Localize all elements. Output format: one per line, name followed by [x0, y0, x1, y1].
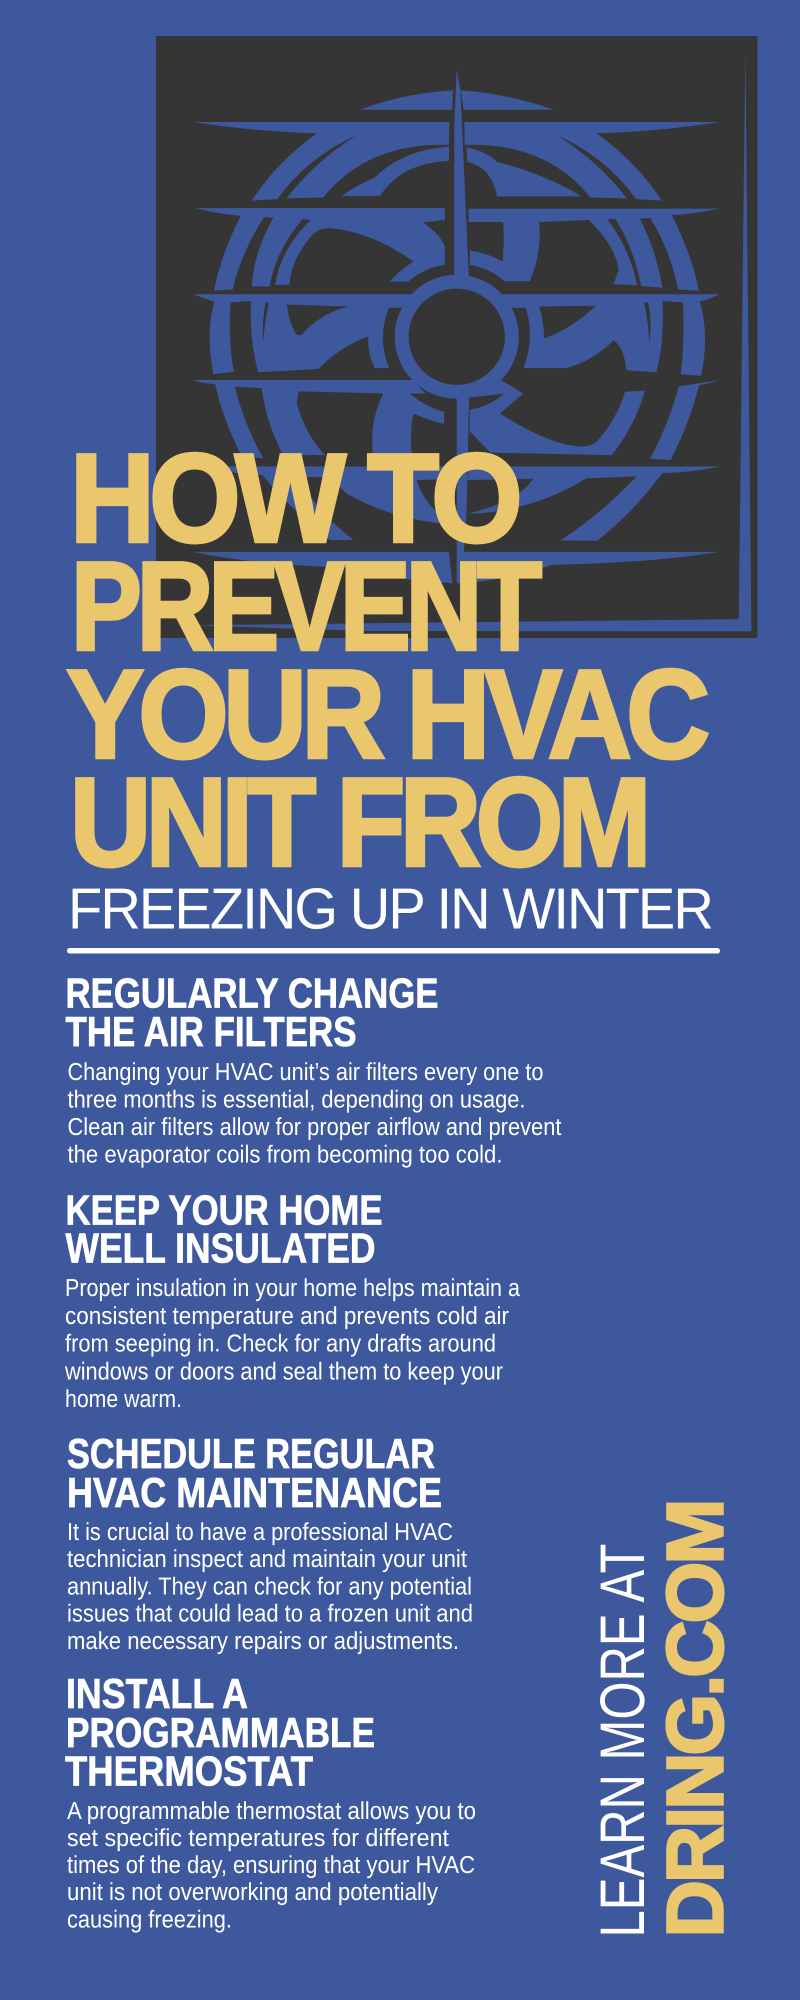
heading: insulation: WELL INSULATED: [66, 1224, 376, 1272]
text: insulation: Proper insulation in your home helps maintain a: [65, 1275, 520, 1302]
heading: air filters: THE AIR FILTERS: [66, 1008, 356, 1055]
section: regularly change the air filters: [66, 970, 562, 1168]
subtitle: FREEZING UP IN WINTER: [68, 876, 712, 942]
heading: insulation: KEEP YOUR HOME: [66, 1186, 382, 1234]
heading: thermostat: INSTALL A: [66, 1670, 248, 1717]
text: insulation: [64, 1275, 520, 1413]
title: UNIT FROM: [70, 752, 646, 892]
title: [66, 428, 707, 892]
title: YOUR HVAC: [66, 644, 707, 784]
title: HOW TO: [70, 428, 518, 568]
text: maintenance: issues that could lead to a frozen unit and: [67, 1600, 473, 1628]
text: insulation: consistent temperature and prevents cold air: [65, 1303, 509, 1330]
text: air filters: Changing your HVAC unit’s air filters every one to: [68, 1059, 544, 1086]
text: air filters: Clean air filters allow for proper airflow and prevent: [68, 1114, 562, 1141]
text: maintenance: [67, 1519, 473, 1655]
text: maintenance: make necessary repairs or adjustments.: [67, 1628, 459, 1655]
text: air filters: three months is essential, depending on usage.: [68, 1086, 526, 1114]
text: maintenance: annually. They can check for any potential: [67, 1574, 472, 1600]
call to action: website: DRING.COM: [650, 1502, 740, 1938]
text: insulation: home warm.: [65, 1386, 182, 1413]
icon: HVAC fan on dark square: [156, 36, 758, 638]
section: schedule regular maintenance: [67, 1430, 473, 1655]
text: maintenance: It is crucial to have a professional HVAC: [67, 1519, 453, 1546]
heading: air filters: REGULARLY CHANGE: [66, 970, 438, 1016]
text: thermostat: times of the day, ensuring that your HVAC: [67, 1852, 475, 1879]
section: install a programmable thermostat: [65, 1670, 476, 1934]
call to action: learn more at: LEARN MORE AT: [588, 1544, 658, 1938]
section: keep your home well insulated: [64, 1186, 520, 1413]
heading: maintenance: [67, 1430, 442, 1516]
heading: insulation: [66, 1186, 382, 1272]
text: thermostat: unit is not overworking and potentially: [67, 1879, 439, 1906]
heading: maintenance: SCHEDULE REGULAR: [67, 1430, 435, 1477]
heading: thermostat: [65, 1670, 375, 1794]
text: air filters: [68, 1059, 562, 1168]
text: insulation: from seeping in. Check for any drafts around: [65, 1330, 496, 1358]
title: PREVENT: [71, 536, 541, 676]
heading: maintenance: HVAC MAINTENANCE: [67, 1469, 442, 1516]
text: air filters: the evaporator coils from becoming too cold.: [68, 1142, 502, 1168]
text: thermostat: causing freezing.: [67, 1906, 232, 1934]
text: thermostat: set specific temperatures for different: [67, 1825, 449, 1852]
text: thermostat: A programmable thermostat allows you to: [67, 1798, 476, 1825]
heading: thermostat: PROGRAMMABLE: [66, 1709, 375, 1756]
text: insulation: windows or doors and seal them to keep your: [64, 1358, 503, 1386]
text: thermostat: [67, 1798, 476, 1934]
heading: thermostat: THERMOSTAT: [65, 1748, 313, 1794]
text: maintenance: technician inspect and maintain your unit: [67, 1546, 467, 1573]
heading: air filters: [66, 970, 438, 1055]
